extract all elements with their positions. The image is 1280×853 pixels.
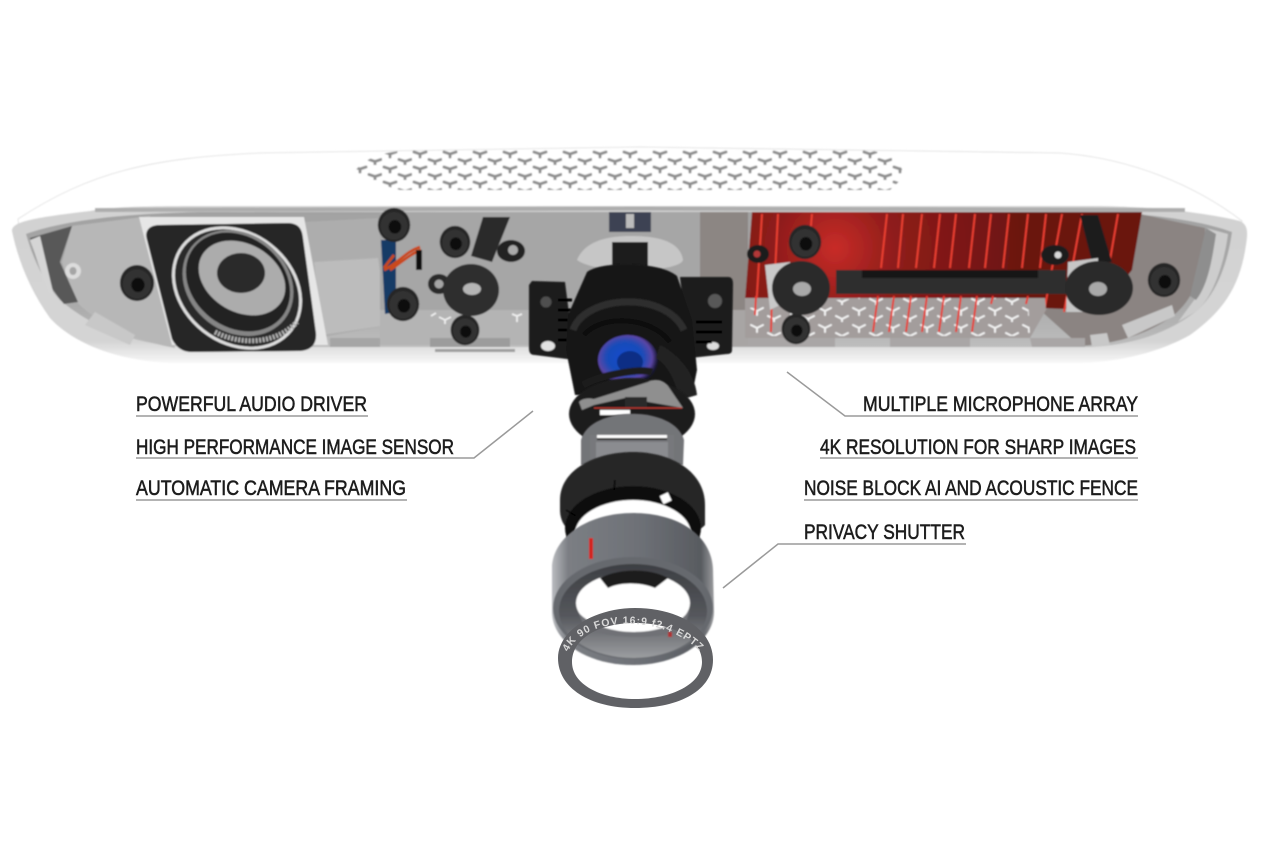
mic mounts xyxy=(65,208,1180,345)
label: high performance image sensor xyxy=(136,411,533,459)
speaker box xyxy=(305,218,388,338)
barrel xyxy=(566,264,697,395)
right mount block xyxy=(680,277,733,358)
front arc xyxy=(656,345,697,400)
left interior plate xyxy=(62,216,175,348)
label: privacy shutter xyxy=(723,521,966,588)
label: powerful audio driver: POWERFUL AUDIO DRIVER xyxy=(136,393,367,416)
left mount block xyxy=(529,281,575,360)
label: multiple microphone array xyxy=(787,372,1138,416)
speaker: audio driver xyxy=(139,201,328,375)
inner clips xyxy=(85,305,1175,352)
label: automatic camera framing: AUTOMATIC CAMERA FRAMING xyxy=(136,477,406,500)
black ring xyxy=(560,452,705,570)
shutter frame xyxy=(581,414,684,465)
lens ring with engraved text: 4K 90 FOV 16:9 f2.4 EPTZ xyxy=(563,616,704,651)
red mark xyxy=(589,538,593,559)
label: privacy shutter: PRIVACY SHUTTER xyxy=(804,521,965,544)
bracket ring xyxy=(569,378,695,450)
panel: central Y marks xyxy=(431,313,522,324)
device body xyxy=(12,147,1247,375)
top shell with speaker grille xyxy=(18,147,1242,235)
panel: perforated plate xyxy=(745,296,1046,338)
microphone bar xyxy=(428,240,1133,316)
center plate xyxy=(380,212,700,345)
panel: heatsink xyxy=(745,212,1142,332)
silver bezel ring xyxy=(552,513,714,665)
right interior plate xyxy=(1040,214,1205,346)
ribbon and cables xyxy=(381,215,1112,314)
lens ring with engraved text xyxy=(558,608,713,708)
lens xyxy=(598,335,658,385)
camera module xyxy=(529,264,733,400)
rim highlight xyxy=(95,208,1185,210)
label: noise block: NOISE BLOCK AI AND ACOUSTIC FENCE xyxy=(804,477,1138,500)
front rim xyxy=(12,206,1247,363)
label: multiple microphone array: MULTIPLE MICROPHONE ARRAY xyxy=(863,393,1138,416)
label: high performance image sensor: HIGH PERFORMANCE IMAGE SENSOR xyxy=(136,436,454,459)
label: 4k resolution: 4K RESOLUTION FOR SHARP IMAGES xyxy=(820,436,1136,459)
interior cavity xyxy=(26,212,1232,347)
